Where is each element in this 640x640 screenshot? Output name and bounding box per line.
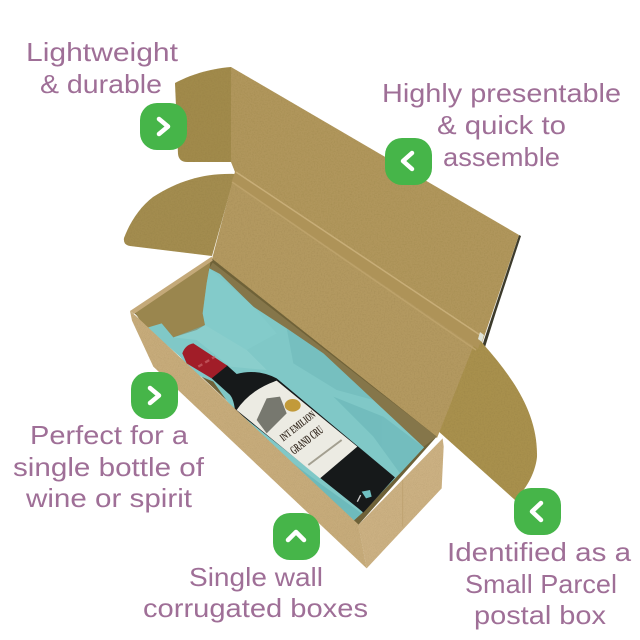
- upper left lid flap: [175, 67, 231, 162]
- heading text: Highly presentable: [382, 78, 621, 108]
- callout: small parcel postal box: Small Parcel: [465, 569, 617, 599]
- label text second line: GRAND CRU: [287, 423, 326, 457]
- blue tissue paper: [145, 268, 424, 524]
- tissue folds: [173, 268, 424, 524]
- wine bottle: [182, 343, 395, 513]
- callout: single wall corrugated: corrugated boxes: [143, 593, 368, 623]
- lid right edge: [474, 235, 521, 376]
- callout: lightweight and durable: & durable: [40, 69, 162, 99]
- lid back panel: [212, 172, 482, 438]
- right flap: [437, 335, 537, 500]
- icon: left chevron button: [385, 138, 432, 185]
- callout: perfect for a single bottle: wine or spirit: [25, 483, 193, 513]
- label text: INT EMILION: [278, 409, 318, 444]
- icon: up chevron button: [273, 513, 320, 560]
- callout: lightweight and durable: [26, 37, 187, 150]
- heading text: Identified as a: [447, 537, 632, 567]
- lid top panel: [231, 67, 519, 343]
- interior back strip: [208, 263, 437, 448]
- heading text: Single wall: [189, 562, 323, 592]
- box end face: [358, 438, 444, 568]
- callout: small parcel postal box: [447, 488, 632, 630]
- interior back left wall: [135, 261, 211, 337]
- icon: left chevron button: [514, 488, 561, 535]
- white tab on lid: [478, 332, 484, 342]
- callout: perfect for a single bottle: [13, 372, 205, 513]
- fold highlight line: [236, 172, 480, 335]
- icon: right chevron button: [140, 103, 187, 150]
- bottle glass: [212, 365, 395, 513]
- callout: perfect for a single bottle: single bottle of: [13, 452, 205, 482]
- box body in zoom coordinates: [130, 257, 444, 568]
- label small line: [308, 440, 342, 465]
- box front face: [130, 311, 367, 568]
- heading text: Lightweight: [26, 37, 179, 67]
- end face crease: [401, 480, 404, 527]
- icon: right chevron button: [131, 372, 178, 419]
- bottle label: [237, 381, 357, 478]
- bottle bottom reflection: [362, 490, 372, 498]
- label seal: [285, 399, 301, 412]
- box illustration: [124, 67, 537, 568]
- callout: highly presentable: assemble: [443, 142, 560, 172]
- callout: small parcel postal box: postal box: [474, 600, 606, 630]
- lid fold strip: [232, 172, 482, 349]
- box rim back wall: [130, 257, 213, 314]
- lower left flap: [124, 174, 235, 256]
- heading text: Perfect for a: [30, 420, 189, 450]
- label illustration: [257, 397, 287, 433]
- capsule highlight: [198, 357, 215, 367]
- callout: highly presentable: [382, 78, 621, 185]
- box interior: [133, 258, 437, 525]
- bottle capsule: [182, 343, 227, 378]
- callout: highly presentable: & quick to: [437, 110, 566, 140]
- callout: single wall corrugated: [143, 513, 368, 623]
